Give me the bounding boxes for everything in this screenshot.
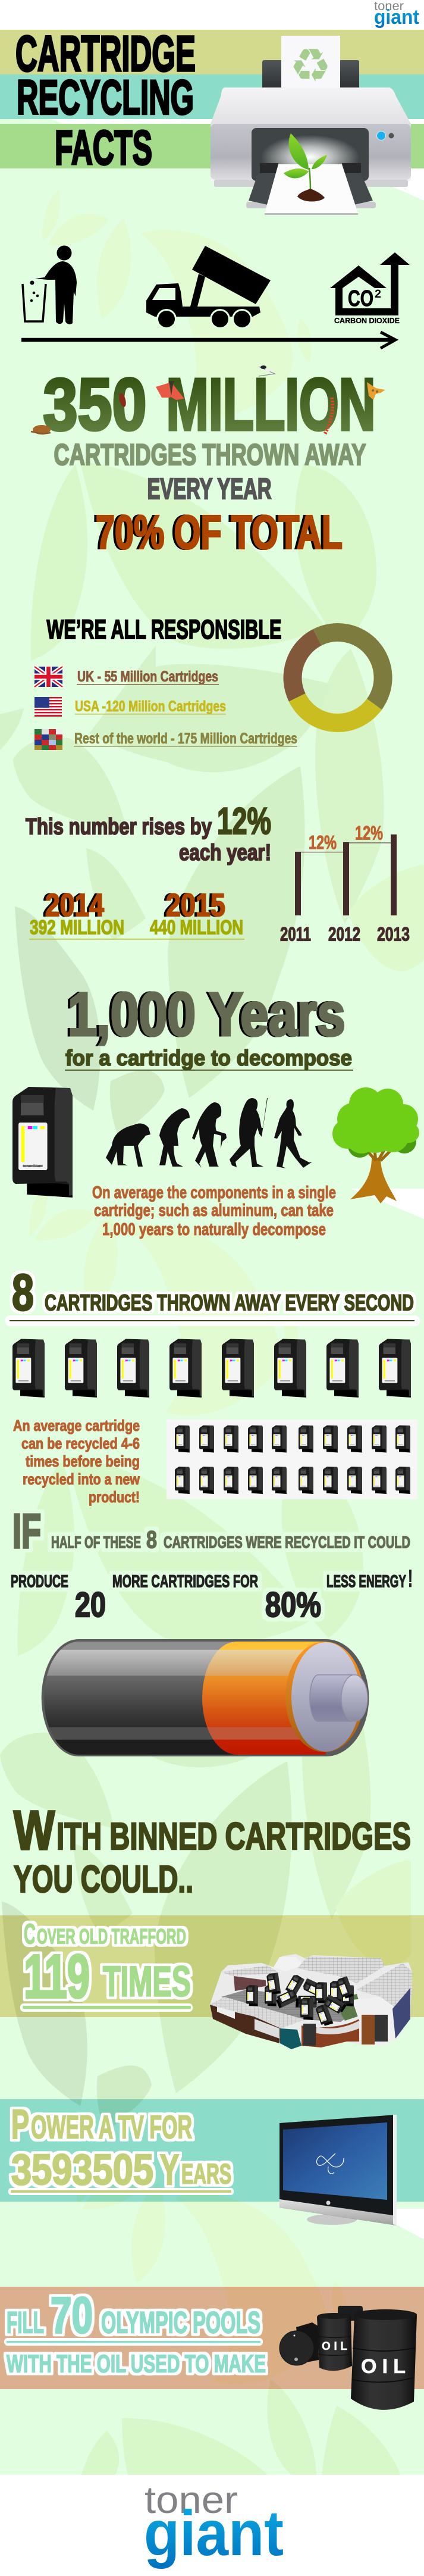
text: this number rises by 12 percent: 12% — [217, 801, 271, 842]
text: an average cartridge can be recycled: An average cartridge — [13, 1417, 140, 1434]
icon: CO2 house: 2 — [375, 288, 381, 301]
icon: oil barrels: OIL — [322, 2340, 347, 2353]
text: produce 20 more cartridges for 80% less energy: ! — [408, 1565, 413, 1592]
heading: 8 cartridges thrown away every second — [5, 1264, 420, 1326]
chart: growth bars 2011-2013: 2013 — [377, 924, 410, 945]
stat: 2014 projection: 392 MILLION — [30, 917, 124, 939]
logo: toner giant footer: giant — [144, 2497, 284, 2569]
panel: grid of 20 cartridges — [167, 1420, 417, 1499]
text: power a tv for 3593505 years — [11, 2101, 231, 2194]
text: UK total: UK - 55 Million Cartridges — [77, 668, 218, 685]
arrow: timeline — [21, 332, 395, 348]
text: cover old trafford 119 times — [24, 1919, 191, 2011]
heading: with binned cartridges you could: YOU COULD.. — [14, 1858, 193, 1900]
text: power a tv for 3593505 years: EARS — [181, 2158, 231, 2189]
icon: insects on headline — [31, 365, 385, 434]
text: components take 1,000 years: cartridge; such as aluminum, can take — [94, 1201, 334, 1220]
text: this number rises by 12 percent — [26, 801, 271, 865]
heading: we're all responsible: WE’RE ALL RESPONSIBLE — [46, 614, 282, 645]
title: RECYCLING — [17, 70, 194, 125]
text: if half were recycled — [12, 1505, 410, 1558]
text: if half were recycled: HALF OF THESE — [51, 1533, 141, 1551]
icon: CO2 house: CO — [348, 286, 373, 311]
icon: UK flag — [34, 667, 62, 687]
text: an average cartridge can be recycled — [13, 1417, 140, 1506]
text: fill 70 olympic pools with the oil used to make: 70 — [51, 2287, 93, 2344]
stat: 2015 projection: 2015 — [166, 887, 225, 923]
stat: 2015 projection — [150, 887, 243, 939]
icon: large ink cartridge — [12, 1087, 73, 1198]
chart: growth bars 2011-2013: 2012 — [328, 924, 360, 945]
text: an average cartridge can be recycled: can be recycled 4-6 — [21, 1434, 140, 1452]
header bands — [0, 30, 424, 168]
text: rest of world total: Rest of the world - 175 Million Cartridges — [74, 730, 297, 747]
text: power a tv for 3593505 years: Y — [160, 2146, 179, 2194]
text: produce 20 more cartridges for 80% less energy: 80% — [265, 1586, 321, 1624]
text: fill 70 olympic pools with the oil used to make: OLYMPIC POOLS — [101, 2306, 260, 2339]
icon: oil barrels — [279, 2306, 417, 2410]
text: cover old trafford 119 times: OVER OLD TRAFFORD — [37, 1925, 186, 1949]
text: cover old trafford 119 times: TIMES — [103, 1958, 191, 2006]
heading: 8 cartridges thrown away every second: 8 — [12, 1264, 34, 1321]
heading: 1,000 years: 1,000 Years — [68, 980, 346, 1049]
text: fill 70 olympic pools with the oil used to make — [7, 2287, 266, 2377]
headline: 350 million: 350 — [43, 364, 146, 446]
icon: old trafford stadium covered in cartridges — [210, 1954, 412, 2049]
chart: growth bars 2011-2013 — [280, 823, 410, 945]
headline: 350 million — [31, 364, 385, 446]
text: fill 70 olympic pools with the oil used to make: FILL — [7, 2306, 44, 2339]
logo: toner giant footer: toner — [145, 2478, 238, 2521]
logo: toner giant top: giant — [374, 6, 419, 29]
text: components take 1,000 years — [92, 1183, 336, 1239]
text: fill 70 olympic pools with the oil used to make: WITH THE OIL USED TO MAKE — [7, 2350, 266, 2377]
icon: world flags — [34, 729, 62, 750]
icon: tree — [332, 1087, 419, 1203]
text: this number rises by 12 percent: This number rises by — [26, 814, 212, 839]
text: power a tv for 3593505 years: 3593505 — [11, 2146, 153, 2194]
text: power a tv for 3593505 years: P — [11, 2101, 29, 2147]
row of 8 cartridges — [12, 1339, 411, 1398]
text: components take 1,000 years: On average the components in a single — [92, 1183, 336, 1202]
icon: USA flag — [34, 697, 62, 717]
text: this number rises by 12 percent: each year! — [179, 840, 271, 865]
icon: oil barrels: OIL — [361, 2355, 406, 2378]
text: an average cartridge can be recycled: product! — [89, 1488, 140, 1506]
text: produce 20 more cartridges for 80% less energy: 20 — [75, 1586, 106, 1624]
icon: person at bin — [23, 245, 77, 324]
stat: 2014 projection: 2014 — [45, 887, 104, 923]
panel: old trafford — [0, 1915, 424, 2049]
chart: growth bars 2011-2013: 12% — [355, 823, 383, 844]
text: if half were recycled: 8 — [146, 1526, 157, 1553]
text: cover old trafford 119 times: C — [24, 1919, 36, 1950]
text: USA total: USA -120 Million Cartridges — [75, 698, 226, 715]
chart: growth bars 2011-2013: 12% — [309, 832, 337, 854]
icon: large ink cartridge: tonerGiant — [23, 1165, 43, 1168]
title: FACTS — [55, 121, 152, 175]
icon: printer with plant — [211, 36, 411, 215]
icon: television — [279, 2115, 397, 2225]
text: components take 1,000 years: 1,000 years to naturally decompose — [102, 1220, 326, 1239]
subheading: for a cartridge to decompose: for a cartridge to decompose — [65, 1046, 352, 1070]
icon: evolution of man silhouettes — [106, 1098, 312, 1168]
text: power a tv for 3593505 years: OWER A TV FOR — [31, 2108, 192, 2145]
icon: recycling symbol: ♻ — [290, 39, 331, 93]
icon: dump truck — [146, 246, 271, 329]
panel: olympic pools — [0, 2287, 424, 2410]
text: produce 20 more cartridges for 80% less energy: MORE CARTRIDGES FOR — [112, 1573, 258, 1592]
text: cover old trafford 119 times: 119 — [24, 1942, 90, 2011]
stat: 2014 projection — [30, 887, 124, 939]
icon: CO2 house: CARBON DIOXIDE — [334, 317, 400, 325]
chart: growth bars 2011-2013: 2011 — [280, 924, 311, 945]
title: CARTRIDGE — [15, 26, 196, 82]
subheading: every year: EVERY YEAR — [147, 473, 271, 505]
chart: donut of cartridge share — [293, 633, 383, 723]
stat: 2015 projection: 440 MILLION — [150, 917, 243, 939]
text: produce 20 more cartridges for 80% less energy — [11, 1565, 413, 1624]
text: if half were recycled: IF — [12, 1505, 41, 1558]
panel: power a tv — [0, 2099, 424, 2225]
heading: with binned cartridges you could — [14, 1799, 411, 1900]
heading: with binned cartridges you could: W — [14, 1799, 55, 1861]
text: an average cartridge can be recycled: recycled into a new — [23, 1470, 140, 1488]
text: produce 20 more cartridges for 80% less energy: PRODUCE — [11, 1573, 68, 1592]
title — [15, 26, 196, 175]
icon: CO2 house — [330, 252, 410, 325]
text: an average cartridge can be recycled: times before being — [26, 1452, 140, 1470]
icon: battery — [42, 1639, 369, 1756]
